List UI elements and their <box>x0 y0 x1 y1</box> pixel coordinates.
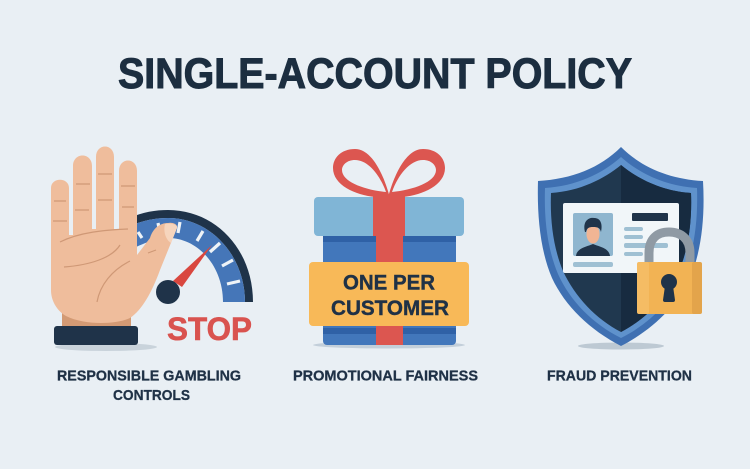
gauge hub <box>156 280 180 304</box>
id card text lines <box>573 213 668 267</box>
box lid <box>314 197 464 236</box>
caption: responsible gambling controls: CONTROLS <box>113 388 190 404</box>
gauge needle <box>173 245 212 287</box>
caption: fraud prevention: FRAUD PREVENTION <box>547 368 692 384</box>
finger creases and palm lines <box>53 174 156 302</box>
label: one per customer: CUSTOMER <box>331 297 449 320</box>
icon: speedometer gauge <box>130 210 253 304</box>
panel: responsible gambling controls <box>51 146 253 404</box>
title: SINGLE-ACCOUNT POLICY <box>118 50 632 98</box>
label: one per customer: ONE PER <box>343 272 435 294</box>
caption: responsible gambling controls: RESPONSIBLE GAMBLING <box>57 368 241 384</box>
panel: fraud prevention <box>538 147 704 384</box>
id photo <box>573 213 613 256</box>
stop label: STOP <box>167 311 252 347</box>
icon: gift box <box>309 149 469 348</box>
gauge ticks <box>138 222 240 284</box>
icon: id card <box>563 203 679 273</box>
caption: responsible gambling controls <box>57 368 241 404</box>
icon: padlock <box>637 232 702 314</box>
ribbon bow <box>333 149 445 198</box>
icon: wrist cuff <box>54 326 138 345</box>
box body <box>323 230 456 345</box>
icon: shield <box>538 147 704 350</box>
panel: promotional fairness <box>293 149 478 384</box>
label: one per customer <box>309 262 469 326</box>
caption: promotional fairness: PROMOTIONAL FAIRNESS <box>293 368 478 384</box>
icon: raised hand <box>51 146 177 351</box>
